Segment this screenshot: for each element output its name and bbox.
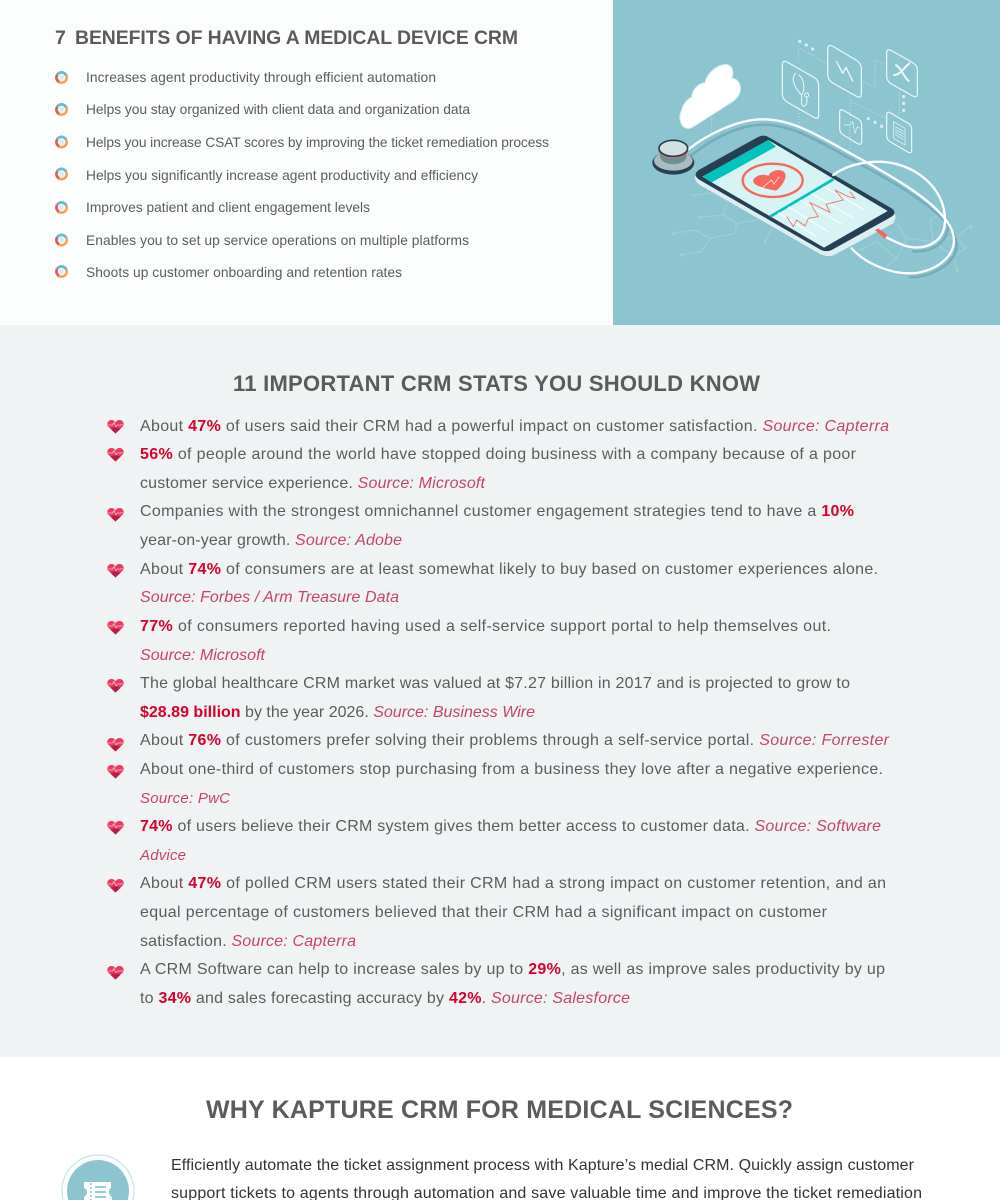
stat 3 [107, 503, 854, 549]
stat 8: About one-third of customers stop purchasing from a business they love after a negative experience. [140, 761, 883, 778]
stat 7: About 76% of customers prefer solving their problems through a self-service portal. Source: Forrester [140, 732, 890, 749]
stat 6: $28.89 billion by the year 2026. Source: Business Wire [140, 704, 535, 721]
icon: support ticket [62, 1155, 134, 1200]
cloud [680, 65, 740, 128]
stats list [107, 418, 890, 1007]
stat 10: satisfaction. Source: Capterra [140, 933, 356, 950]
stat 3: Companies with the strongest omnichannel customer engagement strategies tend to have a 10% [140, 503, 854, 520]
section background: benefits [0, 0, 613, 325]
stat 5 [107, 618, 831, 664]
stat 10: About 47% of polled CRM users stated their CRM had a strong impact on customer retention, and an [140, 875, 886, 892]
stat 2: customer service experience. Source: Microsoft [140, 475, 486, 492]
stat 4 [107, 561, 878, 606]
benefit 5: Improves patient and client engagement levels [86, 200, 370, 215]
paragraph: ticket automation: Efficiently automate the ticket assignment process with Kapture’s medial CRM. Quickly assign customer [171, 1157, 915, 1174]
section background: stats [0, 325, 1000, 1057]
heading: benefits: 7 BENEFITS OF HAVING A MEDICAL DEVICE CRM [55, 27, 518, 49]
stat 9: 74% of users believe their CRM system gives them better access to customer data. Source: Software [140, 818, 881, 835]
stat 6 [107, 675, 850, 721]
stat 4: About 74% of consumers are at least somewhat likely to buy based on customer experiences alone. [140, 561, 878, 578]
stat 8: Source: PwC [140, 790, 230, 807]
benefit 2: Helps you stay organized with client data and organization data [86, 102, 470, 117]
stat 9 [107, 818, 881, 864]
benefit 4: Helps you significantly increase agent productivity and efficiency [86, 168, 478, 183]
stat 8 [107, 761, 883, 807]
illustration: medical phone and stethoscope [613, 0, 1000, 325]
benefit 6: Enables you to set up service operations on multiple platforms [86, 233, 469, 248]
benefits list [56, 70, 549, 280]
stat 3: year-on-year growth. Source: Adobe [140, 532, 402, 549]
stat 2 [107, 446, 857, 492]
stat 9: Advice [139, 847, 186, 864]
phone [695, 138, 895, 256]
stat 6: The global healthcare CRM market was valued at $7.27 billion in 2017 and is projected to grow to [140, 675, 850, 692]
stat 4: Source: Forbes / Arm Treasure Data [140, 589, 399, 606]
paragraph: ticket automation [171, 1157, 922, 1200]
stat 5: 77% of consumers reported having used a self-service support portal to help themselves out. [140, 618, 831, 635]
stat 10 [107, 875, 886, 950]
benefit 7: Shoots up customer onboarding and retention rates [86, 265, 402, 280]
stethoscope head [652, 151, 694, 175]
stat 1: About 47% of users said their CRM had a powerful impact on customer satisfaction. Source: Capterra [140, 418, 889, 435]
stat 10: equal percentage of customers believed that their CRM had a significant impact on customer [140, 904, 828, 921]
stethoscope cord [688, 119, 954, 273]
benefit 1: Increases agent productivity through efficient automation [86, 70, 436, 85]
heading: why Kapture: WHY KAPTURE CRM FOR MEDICAL SCIENCES? [206, 1096, 793, 1124]
stat 11: to 34% and sales forecasting accuracy by 42%. Source: Salesforce [140, 990, 630, 1007]
benefit 3: Helps you increase CSAT scores by improving the ticket remediation process [86, 135, 549, 150]
stat 11: A CRM Software can help to increase sales by up to 29%, as well as improve sales productivity by up [140, 961, 885, 978]
stat 11 [107, 961, 885, 1007]
heading: stats: 11 IMPORTANT CRM STATS YOU SHOULD KNOW [233, 371, 760, 396]
stat 2: 56% of people around the world have stopped doing business with a company because of a poor [140, 446, 857, 463]
stat 5: Source: Microsoft [140, 647, 266, 664]
